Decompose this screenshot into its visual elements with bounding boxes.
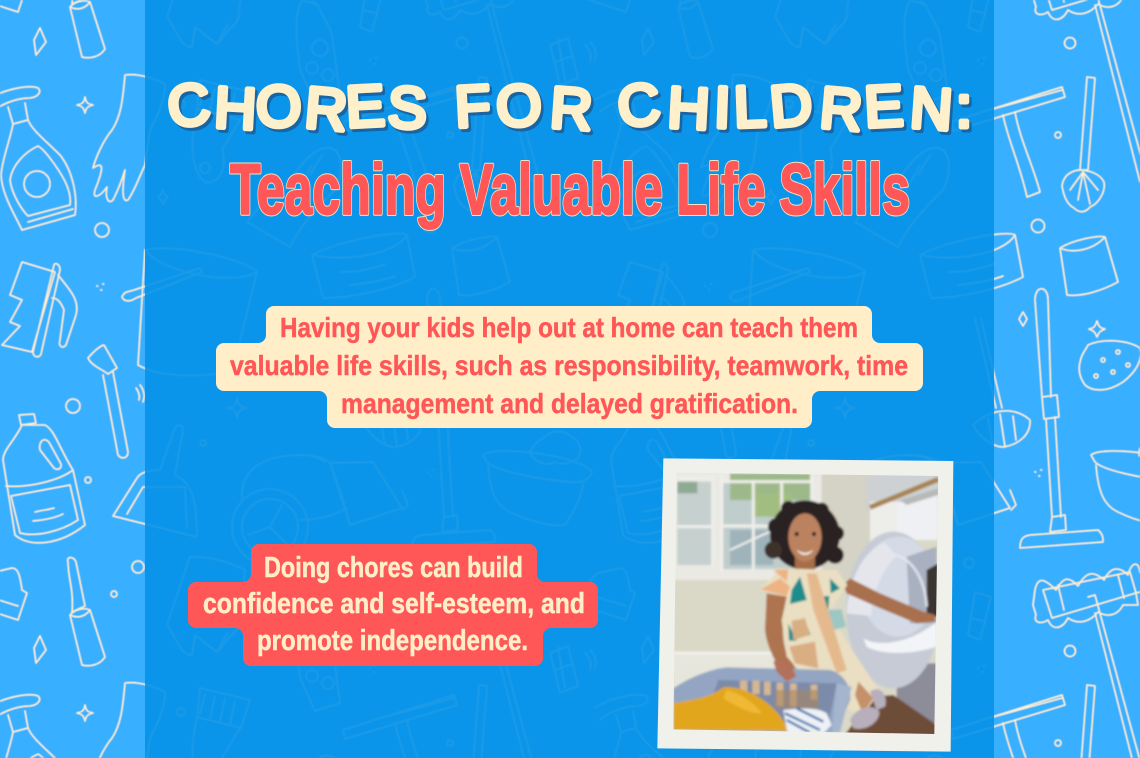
title: Chores for Children: CHORES	[165, 71, 428, 144]
callout: confidence: confidence and self-esteem, and	[203, 588, 585, 620]
callout: confidence: Doing chores can build	[264, 552, 523, 584]
title: Chores for Children: CHILDREN:	[617, 74, 974, 147]
title: Chores for Children	[165, 71, 974, 147]
title: Chores for Children: CHORES	[167, 74, 430, 147]
photo: girl doing laundry in white frame	[657, 458, 953, 752]
title: Chores for Children: CHILDREN:	[615, 71, 972, 144]
callout: life skills	[216, 306, 923, 428]
callout: life skills: management and delayed gratification.	[341, 388, 798, 419]
title: Chores for Children: FOR	[456, 75, 597, 146]
callout: life skills: valuable life skills, such as responsibility, teamwork, time	[230, 350, 908, 381]
callout: confidence: promote independence.	[257, 625, 528, 657]
callout: confidence	[188, 544, 598, 666]
callout: life skills: Having your kids help out at home can teach them	[280, 312, 858, 343]
central darker blue panel	[145, 0, 994, 758]
title: Chores for Children: FOR	[453, 72, 595, 143]
